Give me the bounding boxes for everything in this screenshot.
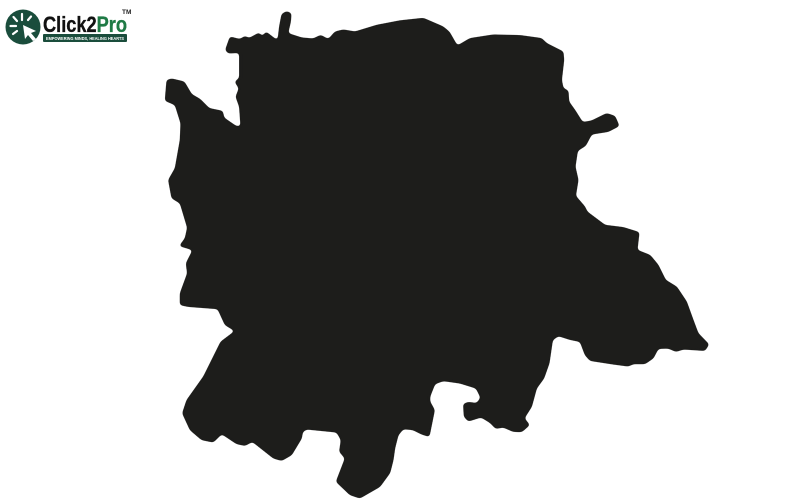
logo icon: green circle with cursor bbox=[6, 10, 40, 44]
logo tagline bar: EMPOWERING MINDS, HEALING HEARTS bbox=[46, 36, 124, 41]
map silhouette bbox=[165, 11, 709, 498]
logo: Click2Pro bbox=[6, 9, 131, 44]
logo wordmark: Click2Pro bbox=[43, 12, 127, 37]
trademark mark: TM bbox=[122, 9, 131, 16]
